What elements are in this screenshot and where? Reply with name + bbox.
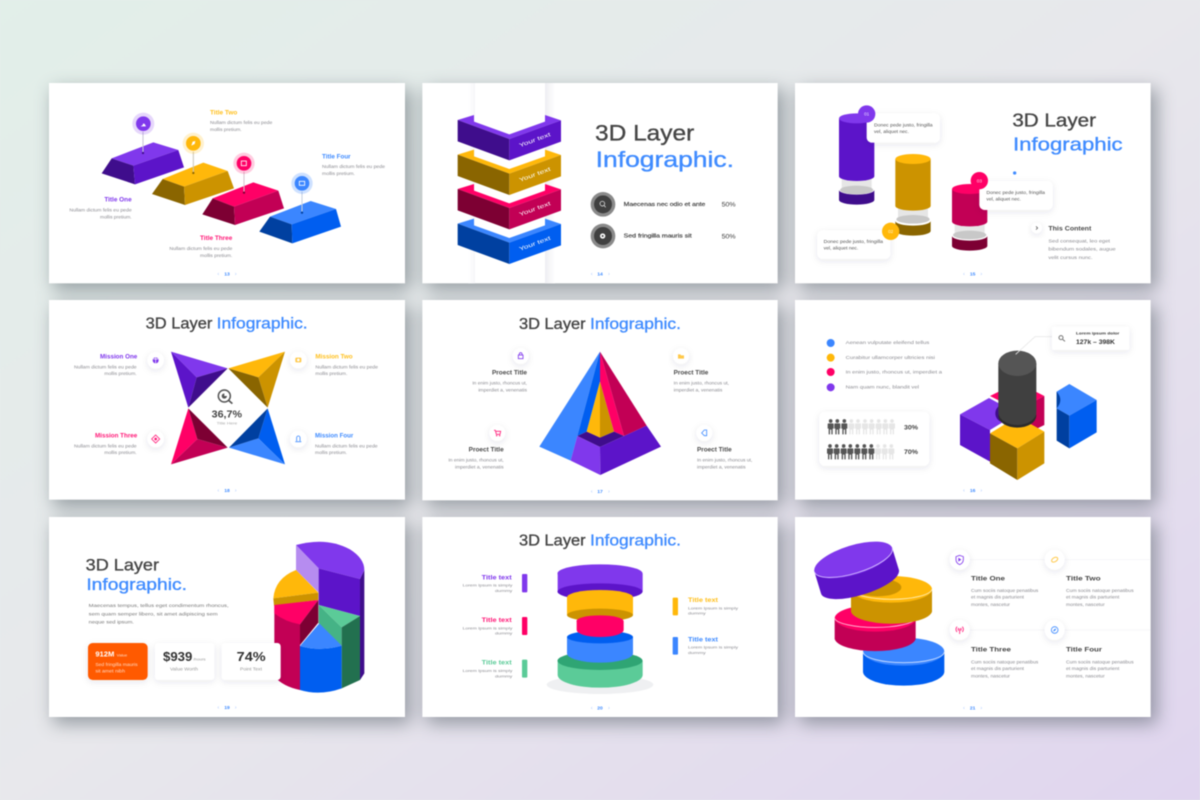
page number: 21 [970, 705, 976, 711]
heading: Infographic. [217, 315, 308, 332]
item: title one [950, 550, 1039, 607]
item: title four: et magnis dis parturient [1066, 666, 1120, 671]
page number [963, 705, 982, 711]
heading [519, 316, 681, 333]
mission one: Mission One [100, 354, 138, 360]
mission one: Nullam dictum felis eu pede [74, 365, 137, 370]
project: top right: In enim justo, rhoncus ut, [674, 380, 729, 385]
callout 03: 03 [977, 178, 982, 183]
page number [591, 272, 610, 278]
pin: purple [132, 113, 154, 154]
card: orange [88, 643, 148, 680]
callout: range: Lorem ipsum dolor [1076, 330, 1120, 335]
label: purple: dummy [495, 588, 512, 593]
pin: pink [233, 153, 255, 194]
yellow puck [851, 576, 932, 624]
heading: Infographic [1013, 134, 1123, 155]
mission two: Mission Two [315, 354, 353, 360]
page number: ‹ [591, 705, 593, 711]
centre stat: Title Here [217, 420, 238, 425]
label: yellow: Lorem Ipsum is simply [688, 605, 738, 610]
text: title two: mollis pretium. [210, 127, 242, 132]
mission three: Mission Three [95, 433, 138, 439]
label: yellow: Title text [688, 598, 718, 604]
purple cylinder [839, 113, 874, 205]
paragraph: Maecenas tempus, tellus eget condimentum rhoncus, [89, 603, 229, 608]
page number: 14 [597, 272, 603, 278]
centre stat [212, 390, 242, 425]
page number: › [235, 488, 237, 494]
text: this content: This Content [1048, 225, 1092, 232]
heading: 3D Layer [146, 315, 212, 332]
label: pink: dummy [495, 631, 512, 636]
page number: ‹ [963, 705, 965, 711]
purple chevron: Your text [519, 132, 552, 149]
pink cylinder [952, 184, 987, 251]
row: first stat: 50% [722, 203, 736, 209]
callout 01: vel, aliquet nec. [874, 129, 909, 134]
yellow cube [990, 417, 1044, 480]
page number: › [980, 488, 982, 494]
panel: slide 20 stacked discs [422, 517, 778, 717]
bullet list: In enim justo, rhoncus ut, imperdiet a [846, 370, 943, 375]
blue chevron: Your text [519, 235, 552, 253]
heading: Infographic. [596, 147, 734, 172]
layered pyramid [539, 352, 661, 475]
pink pyramid [171, 408, 228, 464]
text: title two: Title Two [210, 110, 238, 116]
callout 01: Donec pede justo, fringilla [874, 122, 933, 127]
blue brick [259, 201, 341, 243]
page number: 18 [224, 488, 230, 494]
callout 01: 01 [864, 112, 870, 117]
page number [217, 488, 237, 494]
heading [86, 556, 187, 594]
mission one: mollis pretium. [104, 371, 137, 376]
page number: › [980, 705, 982, 711]
text: title four: mollis pretium. [322, 171, 355, 176]
panel: slide 14 stacked chevrons [422, 83, 778, 283]
label: yellow: dummy [688, 611, 706, 616]
heading: 3D Layer [595, 120, 694, 145]
page number [217, 272, 237, 278]
heading: 3D Layer [86, 556, 159, 575]
panel: slide 13 stepped bricks [49, 83, 405, 283]
bullet list: Nam quam nunc, blandit vel [846, 384, 919, 389]
row: first stat: Maecenas nec odio et ante [624, 202, 705, 208]
paragraph [89, 603, 229, 625]
label: purple [463, 574, 527, 593]
blue puck [863, 638, 944, 686]
row: first stat [591, 192, 736, 217]
text: this content [1031, 223, 1116, 260]
project: bottom right: imperdiet a, venenatis [697, 464, 746, 469]
connector lines [970, 560, 1150, 630]
label: green: dummy [495, 673, 512, 678]
purple cube [960, 398, 1017, 462]
page number: ‹ [217, 705, 219, 711]
yellow brick [152, 163, 234, 205]
page number [963, 272, 982, 278]
row: 30 percent: 30% [904, 424, 918, 431]
row: second stat: 50% [722, 234, 736, 240]
row: 70 percent: 70% [904, 449, 918, 456]
card: orange: Value [117, 654, 127, 658]
label: green [463, 660, 527, 678]
label: blue: Title text [688, 638, 718, 644]
text: title one [69, 198, 132, 220]
page number: 13 [224, 272, 230, 278]
panel: slide 19 segmented cylinder [49, 517, 405, 717]
project: bottom right [696, 425, 752, 469]
bullet list: Aenean vulputate eleifend tellus [846, 340, 930, 345]
pink puck [835, 605, 916, 651]
page number [963, 488, 982, 494]
mission three [74, 431, 164, 455]
mission three: Nullam dictum felis eu pede [74, 443, 137, 448]
label: pink: Title text [482, 618, 512, 624]
project: top left [472, 348, 529, 392]
project: bottom left: In enim justo, rhoncus ut, [448, 458, 504, 463]
blue pyramid [229, 408, 285, 464]
item: title three: Title Three [971, 647, 1011, 654]
page number [217, 705, 237, 711]
page number: › [608, 272, 610, 278]
label: purple: Lorem Ipsum is simply [463, 583, 512, 588]
callout 03: Donec pede justo, fringilla [986, 190, 1045, 195]
yellow cylinder [895, 154, 931, 236]
people panel [819, 412, 929, 466]
project: top left: imperdiet a, venenatis [478, 387, 528, 392]
item: title four [1045, 620, 1134, 678]
paragraph: neque sed ipsum. [89, 620, 134, 625]
card: price [155, 643, 214, 680]
mission two: mollis pretium. [315, 371, 347, 376]
text: title two [210, 110, 273, 132]
heading [1012, 110, 1123, 175]
page number: ‹ [963, 488, 965, 494]
text: title three: mollis pretium. [200, 253, 232, 258]
mission two: Nullam dictum felis eu pede [315, 365, 378, 370]
bullet list [827, 339, 943, 391]
purple brick [102, 142, 184, 184]
text: title three: Nullam dictum felis eu pede [169, 246, 233, 251]
page number [591, 705, 610, 711]
page number: › [980, 272, 982, 278]
page number: › [235, 272, 237, 278]
disc stack [547, 564, 653, 694]
text: title two: Nullam dictum felis eu pede [210, 120, 273, 125]
item: title two: montes, nascetur [1066, 602, 1105, 607]
heading: Infographic. [590, 532, 681, 549]
heading: 3D Layer [519, 532, 586, 549]
label: blue [673, 637, 738, 655]
text: title four [322, 154, 385, 176]
item: title one: Cum sociis natoque penatibus [971, 588, 1039, 593]
yellow chevron [458, 150, 561, 195]
page number [591, 489, 610, 495]
heading: 3D Layer [1012, 110, 1096, 131]
card: percent [222, 643, 281, 680]
label: yellow [673, 598, 738, 616]
text: title three: Title Three [200, 236, 233, 242]
item: title two: et magnis dis parturient [1066, 595, 1120, 600]
item: title one: et magnis dis parturient [971, 595, 1025, 600]
page number: 16 [970, 488, 976, 494]
card: price: $939 [163, 650, 192, 664]
mission three: mollis pretium. [104, 450, 137, 455]
callout 03 [971, 172, 1053, 210]
project: top right: imperdiet a, venenatis [674, 387, 723, 392]
paragraph: sem quam semper libero, sit amet adipiscing sem [89, 611, 218, 616]
item: title three [950, 620, 1039, 678]
panel: slide 21 tilted pucks [795, 517, 1151, 717]
item: title three: et magnis dis parturient [971, 666, 1025, 671]
text: title four: Title Four [322, 154, 351, 160]
item: title two [1045, 550, 1134, 607]
callout 02 [817, 223, 899, 259]
label: pink [463, 617, 527, 636]
project: top left: In enim justo, rhoncus ut, [472, 380, 527, 385]
card: orange: sit amet nibh [95, 668, 126, 673]
page number: › [235, 705, 237, 711]
pink chevron: Your text [519, 201, 552, 218]
heading [519, 532, 681, 549]
text: this content: bibendum sodales, augue [1048, 247, 1116, 252]
row: second stat: Sed fringilla mauris sit [624, 233, 692, 239]
label: green: Title text [482, 661, 512, 667]
callout: range: 127k – 398K [1076, 339, 1115, 346]
mission two [290, 352, 378, 376]
pink brick [202, 182, 284, 225]
item: title three: montes, nascetur [971, 673, 1010, 678]
label: pink: Lorem Ipsum is simply [463, 625, 512, 630]
pin: blue [291, 173, 313, 214]
item: title one: Title One [971, 575, 1005, 582]
project: bottom left: Proect Title [469, 448, 504, 454]
bullet list: Curabitur ullamcorper ultricies nisi [846, 355, 935, 360]
label: purple: Title text [482, 575, 512, 581]
pink chevron [458, 184, 561, 229]
row: second stat [591, 224, 736, 248]
page number: › [608, 705, 610, 711]
blue chevron [458, 219, 561, 264]
purple puck [810, 534, 903, 606]
project: top right: Proect Title [674, 371, 709, 377]
card: percent: 74% [237, 650, 266, 664]
label: blue: dummy [688, 650, 706, 655]
page number: ‹ [591, 272, 593, 278]
slide shadows [53, 89, 1157, 724]
page number: › [608, 489, 610, 495]
page number: 20 [597, 705, 603, 711]
card: price: Value Worth [170, 667, 199, 672]
item: title two: Cum sociis natoque penatibus [1066, 588, 1134, 593]
panel: slide 17 pyramid [422, 300, 778, 500]
project: top right [673, 348, 729, 392]
project: bottom right: In enim justo, rhoncus ut, [697, 458, 752, 463]
heading: 3D Layer [519, 316, 586, 333]
label: green: Lorem Ipsum is simply [463, 668, 512, 673]
panel: slide 18 star of pyramids [49, 300, 405, 500]
panel: slide 16 cubes and people [795, 300, 1151, 500]
blue cube [1057, 384, 1097, 448]
item: title two: Title Two [1066, 575, 1101, 582]
page number: 15 [970, 272, 976, 278]
purple chevron [458, 115, 561, 160]
mission one [74, 352, 164, 376]
mission four [290, 431, 378, 455]
pin: yellow [183, 133, 204, 174]
heading: Infographic. [590, 316, 681, 333]
mission four: Nullam dictum felis eu pede [315, 443, 378, 448]
text: this content: Sed consequat, leo eget [1048, 239, 1111, 244]
callout 02: 02 [888, 229, 894, 234]
label: blue: Lorem Ipsum is simply [688, 645, 738, 650]
page number: ‹ [963, 272, 965, 278]
page number: ‹ [217, 488, 219, 494]
page number: ‹ [591, 489, 593, 495]
card: orange: Sed fringilla mauris [95, 662, 138, 667]
callout 02: vel, aliquet nec. [824, 246, 858, 251]
callout 02: Donec pede justo, fringilla [824, 239, 883, 244]
segmented cylinder chart [273, 542, 364, 693]
text: title one: Nullam dictum felis eu pede [69, 207, 132, 212]
card: percent: Point Text [240, 667, 263, 672]
project: top left: Proect Title [492, 371, 528, 377]
page number: ‹ [217, 272, 219, 278]
pink cube [990, 382, 1044, 438]
callout: range [1016, 327, 1129, 354]
text: title one: mollis pretium. [100, 215, 132, 220]
item: title three: Cum sociis natoque penatibus [971, 659, 1039, 664]
item: title one: montes, nascetur [971, 602, 1010, 607]
item: title four: montes, nascetur [1066, 673, 1105, 678]
project: bottom left [448, 425, 505, 469]
yellow pyramid [228, 352, 285, 408]
text: title four: Nullam dictum felis eu pede [322, 164, 385, 169]
card: price: /hours [193, 657, 206, 661]
text: title one: Title One [104, 198, 132, 204]
panel: slide 15 cylinders [795, 83, 1151, 283]
centre stat: 36,7% [212, 410, 242, 421]
project: bottom right: Proect Title [697, 448, 732, 454]
dark cylinder [998, 351, 1036, 428]
item: title four: Cum sociis natoque penatibus [1066, 659, 1134, 664]
heading: Infographic. [86, 575, 187, 594]
yellow chevron: Your text [519, 166, 552, 184]
page number: 19 [224, 705, 230, 711]
heading [595, 120, 734, 172]
heading [146, 315, 308, 332]
text: this content: velit cursus nunc. [1048, 255, 1093, 260]
page number: 17 [597, 489, 603, 495]
text: title three [169, 236, 233, 258]
purple pyramid [171, 352, 228, 408]
card: orange: 912M [95, 649, 114, 658]
item: title four: Title Four [1066, 647, 1102, 654]
mission four: Mission Four [315, 433, 354, 439]
mission four: mollis pretium. [315, 450, 347, 455]
callout 01 [858, 105, 940, 143]
callout 03: vel, aliquet nec. [986, 196, 1021, 201]
project: bottom left: imperdiet a, venenatis [455, 464, 504, 469]
